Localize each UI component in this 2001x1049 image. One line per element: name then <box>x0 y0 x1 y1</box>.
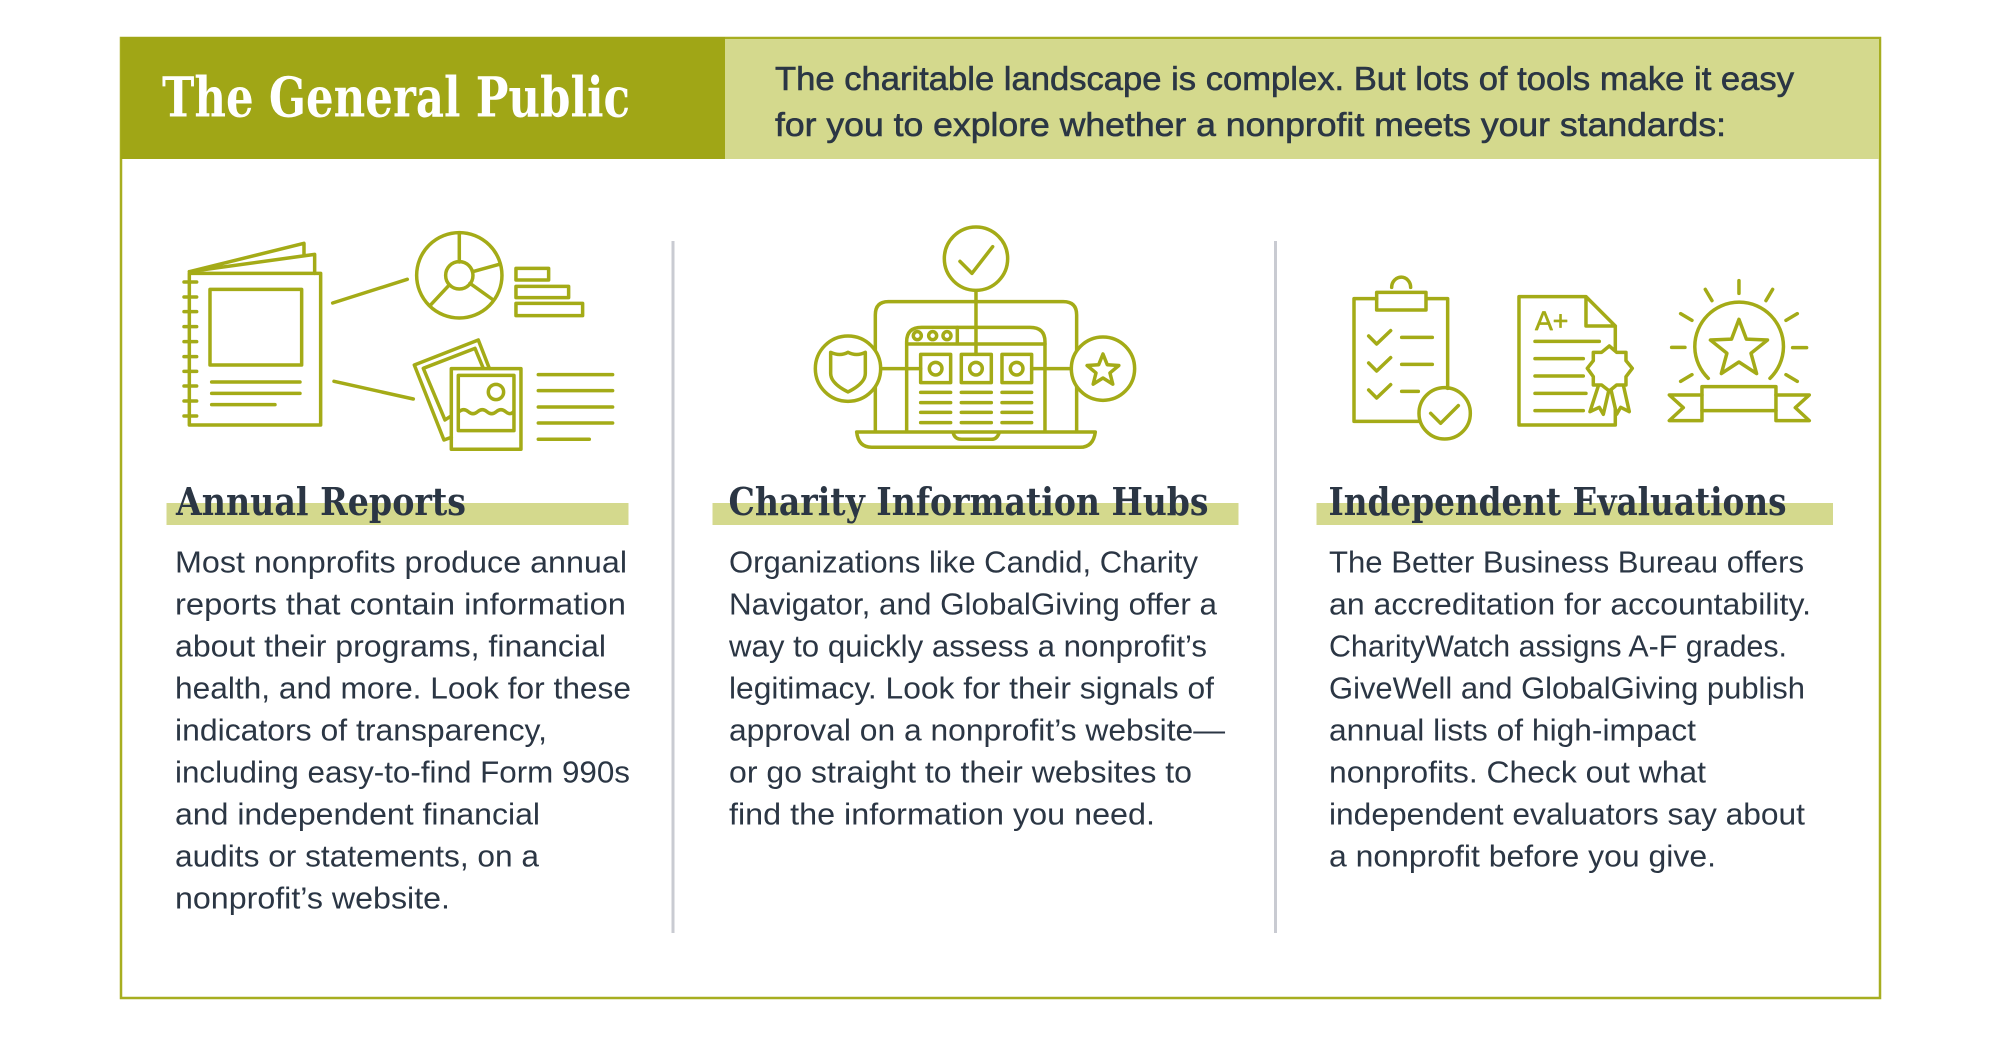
panel: charity information hubs <box>712 227 1238 832</box>
title block: The General Public <box>162 64 630 130</box>
icon: graded document with seal <box>1519 297 1632 425</box>
text: independent evaluations body: The Better Business Bureau offers <box>1329 545 1804 580</box>
icon: graded document with seal: A+ <box>1535 306 1568 336</box>
panel: independent evaluations <box>1316 277 1833 874</box>
text: annual reports body: indicators of transparency, <box>175 713 547 748</box>
text: annual reports body: about their programs, financial <box>175 629 606 664</box>
text: annual reports body <box>175 545 631 916</box>
text: independent evaluations body: an accreditation for accountability. <box>1329 587 1811 622</box>
text: annual reports body: nonprofit’s website. <box>175 881 450 916</box>
text: annual reports body: health, and more. Look for these <box>175 671 631 706</box>
text: annual reports body: and independent financial <box>175 797 540 832</box>
text: charity hubs body: way to quickly assess a nonprofit’s <box>728 629 1207 664</box>
text: independent evaluations body: independent evaluators say about <box>1329 797 1805 832</box>
panel: annual reports <box>166 233 631 916</box>
heading: independent evaluations: Independent Evaluations <box>1328 480 1786 525</box>
text: annual reports body: including easy-to-find Form 990s <box>175 755 630 790</box>
text: independent evaluations body: CharityWatch assigns A-F grades. <box>1329 629 1787 664</box>
text: charity hubs body: legitimacy. Look for their signals of <box>729 671 1214 706</box>
text: independent evaluations body <box>1329 545 1811 874</box>
text: annual reports body: reports that contain information <box>175 587 626 622</box>
text: independent evaluations body: nonprofits. Check out what <box>1329 755 1706 790</box>
text: independent evaluations body: a nonprofit before you give. <box>1329 839 1716 874</box>
heading: charity information hubs: Charity Information Hubs <box>728 480 1208 525</box>
text: independent evaluations body: GiveWell and GlobalGiving publish <box>1329 671 1805 706</box>
text: charity hubs body: Organizations like Candid, Charity <box>729 545 1198 580</box>
text: charity hubs body: find the information you need. <box>729 797 1155 832</box>
icon: clipboard checklist <box>1354 277 1470 439</box>
text: charity hubs body <box>728 545 1225 832</box>
text: independent evaluations body: annual lists of high-impact <box>1329 713 1696 748</box>
header band <box>121 37 1879 159</box>
title block <box>121 37 725 159</box>
text: charity hubs body: approval on a nonprofit’s website— <box>729 713 1225 748</box>
icon: laptop with badges <box>815 227 1135 447</box>
heading: annual reports: Annual Reports <box>175 480 466 525</box>
text: annual reports body: Most nonprofits produce annual <box>175 545 627 580</box>
intro block <box>725 39 1879 159</box>
text: annual reports body: audits or statements, on a <box>175 839 540 874</box>
text: charity hubs body: or go straight to their websites to <box>729 755 1192 790</box>
intro block: for you to explore whether a nonprofit meets your standards: <box>775 106 1726 143</box>
intro block: The charitable landscape is complex. But lots of tools make it easy <box>775 60 1795 97</box>
text: charity hubs body: Navigator, and GlobalGiving offer a <box>729 587 1218 622</box>
icon: annual report with chart and photos <box>184 233 613 449</box>
icon: award star with ribbon <box>1669 281 1809 421</box>
